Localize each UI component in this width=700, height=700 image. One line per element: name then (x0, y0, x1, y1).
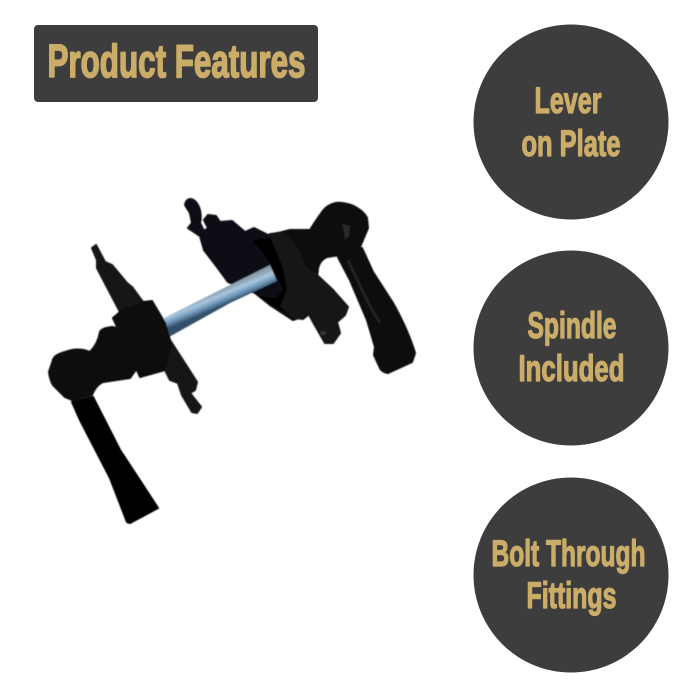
back knob highlight (342, 224, 350, 240)
badge text line: Included (518, 348, 624, 389)
badge text line: Lever (534, 80, 602, 121)
back plate (185, 199, 318, 320)
plate screw hole (320, 331, 326, 335)
front lever (72, 397, 158, 523)
spindle (160, 265, 277, 342)
title text: Product Features (48, 35, 306, 87)
title banner (34, 25, 318, 102)
badge text line: on Plate (522, 123, 620, 164)
front knob (49, 318, 140, 400)
feature badge: spindle included (474, 250, 668, 446)
front rose (113, 301, 172, 377)
back knob (282, 203, 368, 277)
badge text line: Fittings (526, 575, 616, 616)
front plate (92, 245, 201, 413)
badge text line: Spindle (528, 305, 616, 346)
product photo: door lever set with spindle (49, 199, 415, 523)
back rose opening (252, 238, 300, 314)
back lever (338, 248, 415, 373)
inner plate with lobes (270, 233, 348, 343)
back lever highlight (348, 260, 380, 323)
feature badge: bolt through fittings (474, 478, 668, 672)
feature badge: lever on plate (474, 24, 668, 220)
